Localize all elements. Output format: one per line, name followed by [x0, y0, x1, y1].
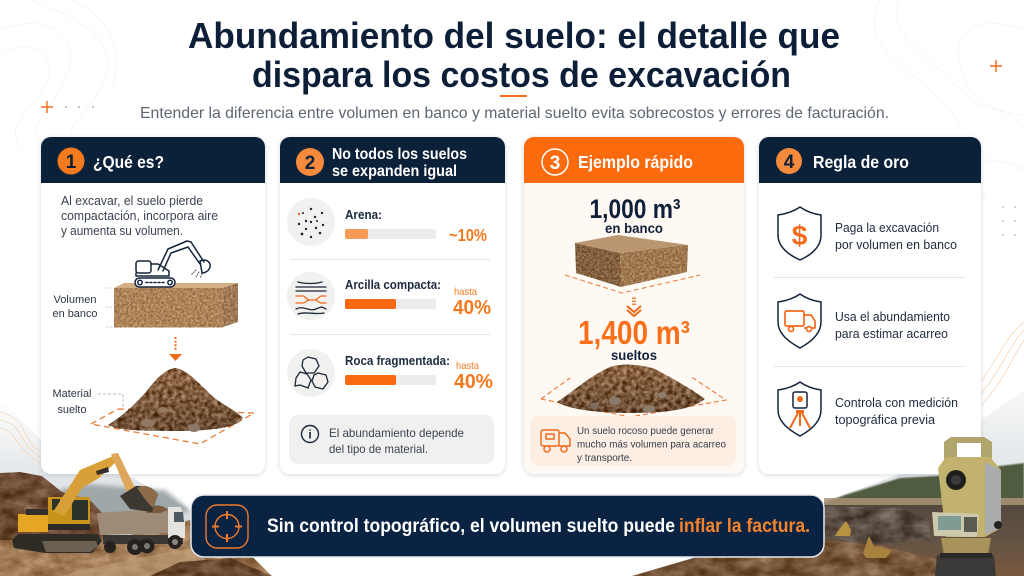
- arrow: down: [169, 337, 182, 361]
- dashed footprint: [541, 376, 726, 417]
- row: fragmented rock: Roca fragmentada:: [345, 354, 450, 368]
- icon: crosshair target: [206, 505, 248, 548]
- label: loose material: [52, 388, 92, 416]
- panel 4: golden rule: [759, 137, 981, 474]
- panel 2: soils expand differently: [280, 137, 505, 474]
- photo: dump truck: [97, 506, 185, 555]
- rule: pay by bank volume: $: [792, 220, 808, 251]
- row: compact clay: [287, 272, 491, 320]
- note: depends on material: El abundamiento depende: [329, 426, 464, 440]
- photo background: excavation pit right: [632, 322, 1024, 576]
- panel 1 header: ¿Qué es?: [93, 152, 164, 172]
- title: [188, 15, 840, 95]
- topographic contour pattern: top left: [0, 0, 117, 160]
- label: loose material: Material: [52, 388, 92, 400]
- loose soil pile: [557, 365, 705, 413]
- dashed footprint: [91, 409, 254, 444]
- panel 3 header: Ejemplo rápido: [578, 152, 693, 172]
- loose material pile: [108, 368, 243, 432]
- panel 1 description: Al excavar, el suelo pierde: [61, 194, 203, 208]
- panel 3 header: 3: [550, 153, 560, 174]
- row: sand: [287, 198, 487, 246]
- photo background: construction site left: [0, 398, 272, 576]
- row: sand: ~10%: [449, 225, 487, 245]
- label: loose material: suelto: [58, 404, 86, 416]
- panel 1 header: 1: [66, 152, 77, 173]
- row: fragmented rock: [287, 349, 493, 397]
- soil block: bank volume: [106, 283, 238, 328]
- note: depends on material: i: [308, 428, 312, 442]
- arrow: down to loose volume: [627, 298, 641, 316]
- stat: 1,000 cubic metres: [590, 194, 680, 236]
- panel 4 header: 4: [784, 152, 795, 173]
- stat: 1,400 cubic metres: sueltos: [611, 347, 657, 363]
- rule: prior topographic survey: Controla con medición: [835, 396, 958, 410]
- title: dispara los costos de excavación: [252, 54, 791, 95]
- callout: rocky soil: mucho más volumen para acarreo: [577, 438, 726, 450]
- title underline accent: [500, 95, 527, 97]
- panel 3: quick example: [524, 137, 744, 474]
- rule: pay by bank volume: por volumen en banco: [835, 238, 957, 252]
- row: sand: Arena:: [345, 208, 382, 222]
- rule: pay by bank volume: [778, 207, 957, 260]
- panel 1 description: y aumenta su volumen.: [61, 224, 183, 238]
- stat: 1,000 cubic metres: 1,000 m³: [590, 194, 680, 224]
- row: fragmented rock: hasta: [456, 360, 479, 372]
- soil block: [565, 235, 700, 293]
- stat: 1,000 cubic metres: en banco: [605, 220, 663, 236]
- decorative plus and dots: [41, 60, 1016, 236]
- panel 3 header: [524, 137, 744, 183]
- panel 1: what it is: [41, 137, 265, 474]
- rule: estimate hauling: Usa el abundamiento: [835, 310, 950, 324]
- title: Abundamiento del suelo: el detalle que: [188, 15, 840, 56]
- panel 2 header: [280, 137, 505, 183]
- stat: 1,400 cubic metres: [578, 314, 690, 363]
- label: bank volume: [52, 294, 98, 320]
- panel 4 header: Regla de oro: [813, 152, 909, 172]
- rule: estimate hauling: para estimar acarreo: [835, 327, 948, 341]
- callout: rocky soil: [530, 416, 736, 466]
- rule: pay by bank volume: Paga la excavación: [835, 221, 939, 235]
- row: compact clay: hasta: [454, 286, 477, 298]
- note: depends on material: del tipo de material.: [329, 442, 428, 456]
- bottom banner: [191, 495, 824, 557]
- subtitle: Entender la diferencia entre volumen en banco y material suelto evita sobrecostos y errores de facturación.: [140, 105, 889, 122]
- rule: prior topographic survey: topográfica previa: [835, 413, 935, 427]
- panel 4 header: [759, 137, 981, 183]
- icon: excavator line drawing: [135, 241, 210, 287]
- callout: rocky soil: Un suelo rocoso puede generar: [577, 425, 714, 437]
- stat: 1,400 cubic metres: 1,400 m³: [578, 314, 690, 351]
- bottom banner: inflar la factura.: [679, 516, 810, 537]
- panel 2 header: No todos los suelos: [332, 146, 467, 163]
- row: compact clay: 40%: [453, 297, 491, 319]
- callout: rocky soil: y transporte.: [577, 452, 632, 464]
- panel 1 description: [61, 194, 218, 238]
- rule: estimate hauling: [778, 294, 950, 348]
- label: bank volume: en banco: [52, 308, 98, 320]
- rule: prior topographic survey: [778, 382, 958, 436]
- row: compact clay: Arcilla compacta:: [345, 278, 441, 292]
- label: bank volume: Volumen: [54, 294, 96, 306]
- row: fragmented rock: 40%: [454, 371, 493, 393]
- photo: excavator: [12, 453, 158, 553]
- topographic contour pattern: top right: [874, 0, 1024, 200]
- panel 1 header: [41, 137, 265, 183]
- panel 2 header: se expanden igual: [332, 163, 457, 180]
- panel 1 description: compactación, incorpora aire: [61, 209, 218, 223]
- panel 2 header: 2: [305, 153, 315, 174]
- photo: total station: [932, 437, 1002, 576]
- note: depends on material: [289, 415, 494, 464]
- bottom banner: Sin control topográfico, el volumen suelto puede: [267, 516, 675, 537]
